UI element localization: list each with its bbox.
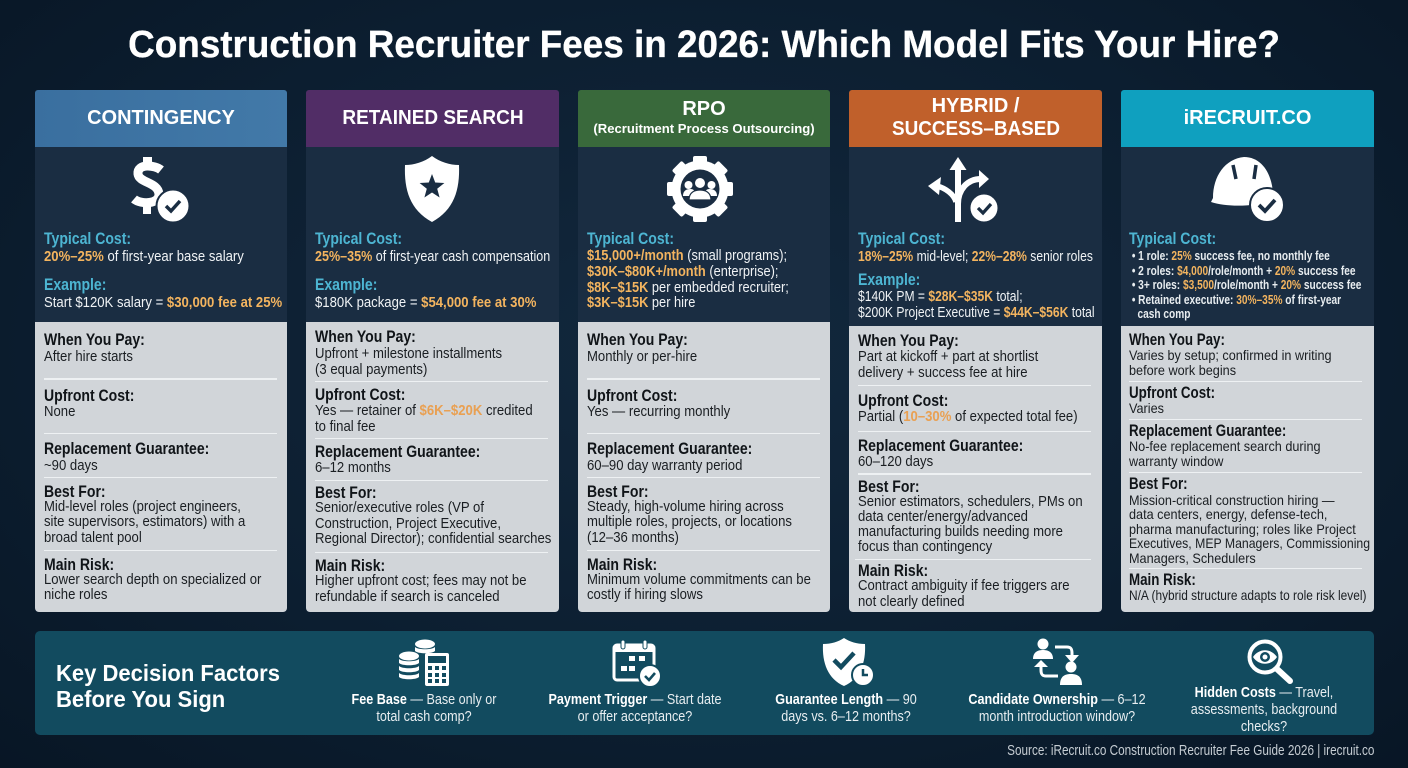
when you pay: When You Pay: <box>315 327 416 346</box>
text: fee base: Fee Base — Base only or <box>352 691 496 708</box>
icon: branching arrows <box>928 157 998 222</box>
main risk: refundable if search is canceled <box>315 588 500 604</box>
best for: site supervisors, estimators) with a <box>44 514 245 530</box>
main risk: niche roles <box>44 587 107 603</box>
main risk: Main Risk: <box>858 561 928 580</box>
best for <box>1128 474 1370 566</box>
upfront cost: Upfront Cost: <box>858 390 948 410</box>
main risk: Main Risk: <box>315 556 385 575</box>
heading: retained search <box>306 90 559 147</box>
heading: hybrid: HYBRID / <box>932 95 1019 117</box>
typical cost: 25%–35% of first-year cash compensation <box>315 249 550 265</box>
best for: Best For: <box>44 482 106 500</box>
panel: retained search <box>306 90 559 612</box>
typical cost <box>587 229 789 311</box>
main risk: costly if hiring slows <box>587 587 703 603</box>
best for: data center/energy/advanced <box>858 509 1028 525</box>
best for: manufacturing builds needing more <box>858 524 1063 540</box>
main risk <box>587 554 811 603</box>
main risk: Contract ambiguity if fee triggers are <box>858 578 1070 594</box>
when you pay <box>587 330 697 365</box>
text: fee base: total cash comp? <box>376 708 472 725</box>
example <box>858 270 1095 320</box>
panel: iRecruit.co <box>1121 90 1374 612</box>
example: $140K PM = $28K–$35K total; <box>858 288 1023 304</box>
main risk <box>858 561 1070 610</box>
example: Example: <box>858 270 920 288</box>
icon: magnifier with eye <box>1246 638 1296 686</box>
icon: calendar check <box>612 639 664 689</box>
panel: key decision factors <box>35 631 1374 735</box>
upfront cost <box>858 390 1078 424</box>
example: $200K Project Executive = $44K–$56K total <box>858 304 1095 320</box>
typical cost: Typical Cost: <box>587 229 674 248</box>
details panel <box>35 322 287 612</box>
replacement guarantee: Replacement Guarantee: <box>587 439 752 458</box>
heading: contingency: CONTINGENCY <box>87 107 235 129</box>
upfront cost: Upfront Cost: <box>587 386 677 404</box>
example: $180K package = $54,000 fee at 30% <box>315 294 536 310</box>
when you pay: Upfront + milestone installments <box>315 346 502 362</box>
best for: Best For: <box>858 476 920 496</box>
typical cost: • 1 role: 25% success fee, no monthly fee <box>1132 248 1330 263</box>
heading: contingency <box>35 90 287 147</box>
upfront cost: Yes — recurring monthly <box>587 404 730 420</box>
replacement guarantee: Replacement Guarantee: <box>1128 422 1286 440</box>
best for: multiple roles, projects, or locations <box>587 514 792 530</box>
example: Example: <box>315 274 377 294</box>
typical cost: $3K–$15K per hire <box>587 295 695 311</box>
when you pay <box>44 330 145 365</box>
best for: pharma manufacturing; roles like Project <box>1128 520 1355 536</box>
replacement guarantee: warranty window <box>1128 453 1223 469</box>
panel: contingency <box>35 90 287 612</box>
heading: key decision factors <box>56 660 280 712</box>
typical cost: Typical Cost: <box>858 229 945 248</box>
typical cost: • 2 roles: $4,000/role/month + 20% success fee <box>1132 262 1355 278</box>
heading: key decision factors: Before You Sign <box>56 686 225 712</box>
when you pay: (3 equal payments) <box>315 362 427 378</box>
text: candidate ownership: month introduction window? <box>979 708 1135 725</box>
text: guarantee length: Guarantee Length — 90 <box>775 691 917 708</box>
replacement guarantee <box>44 439 209 474</box>
text: payment trigger: or offer acceptance? <box>578 708 692 725</box>
when you pay: After hire starts <box>44 349 133 365</box>
best for <box>315 483 551 547</box>
text: fee base <box>352 691 496 725</box>
typical cost: $8K–$15K per embedded recruiter; <box>587 280 789 296</box>
typical cost: Typical Cost: <box>1129 229 1216 248</box>
replacement guarantee <box>315 442 480 476</box>
typical cost: cash comp <box>1137 306 1190 321</box>
icon: candidate swap <box>1032 638 1086 688</box>
typical cost: Typical Cost: <box>315 229 402 248</box>
upfront cost: Varies <box>1128 400 1163 416</box>
icon: hard hat check <box>1211 157 1283 221</box>
example <box>315 274 536 310</box>
details panel <box>1121 326 1374 612</box>
upfront cost <box>587 386 730 420</box>
typical cost <box>858 229 1093 265</box>
best for: Construction, Project Executive, <box>315 516 501 532</box>
heading: key decision factors: Key Decision Factors <box>56 660 280 686</box>
best for: Regional Director); confidential searches <box>315 531 551 547</box>
when you pay: Varies by setup; confirmed in writing <box>1128 346 1331 362</box>
upfront cost: Upfront Cost: <box>1128 384 1215 402</box>
when you pay: Monthly or per-hire <box>587 349 697 365</box>
typical cost: $30K–$80K+/month (enterprise); <box>587 264 779 280</box>
icon: dollar check <box>131 157 188 222</box>
when you pay <box>1128 330 1331 378</box>
when you pay: delivery + success fee at hire <box>858 365 1028 381</box>
best for <box>44 482 246 546</box>
when you pay <box>315 327 502 378</box>
text: hidden costs <box>1191 684 1337 735</box>
typical cost: 20%–25% of first-year base salary <box>44 249 244 265</box>
main risk <box>315 556 527 604</box>
typical cost: Typical Cost: <box>44 229 131 248</box>
best for: Managers, Schedulers <box>1128 550 1255 566</box>
upfront cost: Upfront Cost: <box>315 384 405 404</box>
heading: retained search: RETAINED SEARCH <box>342 107 523 129</box>
best for: Mission-critical construction hiring — <box>1128 492 1334 508</box>
heading: RPO: RPO <box>682 98 726 120</box>
icon: coins and calculator <box>399 640 449 686</box>
typical cost <box>1129 229 1361 321</box>
upfront cost: Upfront Cost: <box>44 386 134 404</box>
best for: Steady, high-volume hiring across <box>587 498 784 514</box>
typical cost: • Retained executive: 30%–35% of first-year <box>1132 292 1341 306</box>
best for: (12–36 months) <box>587 530 679 546</box>
upfront cost <box>44 386 134 420</box>
replacement guarantee: Replacement Guarantee: <box>44 439 209 458</box>
heading: iRecruit.co: iRECRUIT.CO <box>1184 107 1311 129</box>
typical cost: • 3+ roles: $3,500/role/month + 20% success fee <box>1132 277 1361 292</box>
main risk <box>44 554 262 603</box>
upfront cost: Partial (10–30% of expected total fee) <box>858 408 1078 424</box>
when you pay: When You Pay: <box>1128 330 1224 348</box>
text: candidate ownership: Candidate Ownership — 6–12 <box>968 691 1146 708</box>
icon: shield with clock <box>822 637 882 687</box>
example <box>44 274 282 310</box>
heading: hybrid <box>849 90 1102 147</box>
heading: iRecruit.co <box>1121 90 1374 147</box>
text: guarantee length: days vs. 6–12 months? <box>781 708 911 725</box>
heading: hybrid: SUCCESS–BASED <box>891 118 1060 140</box>
when you pay <box>858 331 1038 381</box>
when you pay: before work begins <box>1128 362 1236 378</box>
best for: Best For: <box>587 482 649 500</box>
replacement guarantee: 6–12 months <box>315 460 391 476</box>
best for: focus than contingency <box>858 539 992 555</box>
typical cost <box>315 229 550 265</box>
main risk: Higher upfront cost; fees may not be <box>315 573 527 589</box>
text: hidden costs: checks? <box>1241 718 1287 735</box>
main risk <box>1128 570 1366 603</box>
upfront cost: Yes — retainer of $6K–$20K credited <box>315 402 533 418</box>
when you pay: When You Pay: <box>587 330 688 349</box>
replacement guarantee <box>1128 422 1320 469</box>
replacement guarantee <box>587 439 752 474</box>
heading: RPO <box>578 90 830 147</box>
main risk: not clearly defined <box>858 594 965 610</box>
replacement guarantee: ~90 days <box>44 458 98 474</box>
replacement guarantee: 60–90 day warranty period <box>587 458 742 474</box>
upfront cost <box>1128 384 1215 416</box>
details panel <box>849 326 1102 612</box>
main risk: N/A (hybrid structure adapts to role risk level) <box>1128 586 1366 602</box>
typical cost: 18%–25% mid-level; 22%–28% senior roles <box>858 249 1093 265</box>
best for: broad talent pool <box>44 530 142 546</box>
when you pay: When You Pay: <box>44 330 145 349</box>
main risk: Main Risk: <box>44 554 114 574</box>
heading: RPO: (Recruitment Process Outsourcing) <box>593 121 815 136</box>
typical cost <box>44 229 244 265</box>
icon: shield star <box>404 156 460 222</box>
best for <box>858 476 1083 555</box>
panel: RPO <box>578 90 830 612</box>
replacement guarantee: Replacement Guarantee: <box>858 436 1023 454</box>
replacement guarantee: 60–120 days <box>858 454 933 470</box>
best for: Senior estimators, schedulers, PMs on <box>858 494 1083 510</box>
when you pay: When You Pay: <box>858 331 959 350</box>
best for: Executives, MEP Managers, Commissioning <box>1128 535 1370 551</box>
title: Construction Recruiter Fees in 2026: Which Model Fits Your Hire? <box>128 24 1280 66</box>
panel: hybrid <box>849 90 1102 612</box>
source line: Source: iRecruit.co Construction Recruiter Fee Guide 2026 | irecruit.co <box>1007 743 1374 759</box>
best for <box>587 482 792 546</box>
best for: Senior/executive roles (VP of <box>315 500 484 516</box>
text: hidden costs: Hidden Costs — Travel, <box>1195 684 1333 701</box>
typical cost: $15,000+/month (small programs); <box>587 248 787 264</box>
replacement guarantee: Replacement Guarantee: <box>315 442 480 461</box>
icon: gear with people <box>667 156 733 222</box>
main risk: Main Risk: <box>587 554 657 574</box>
when you pay: Part at kickoff + part at shortlist <box>858 349 1038 365</box>
main risk: Minimum volume commitments can be <box>587 572 811 588</box>
best for: Mid-level roles (project engineers, <box>44 498 241 514</box>
example: Example: <box>44 274 106 294</box>
upfront cost <box>315 384 533 434</box>
best for: data centers, energy, defense-tech, <box>1128 506 1327 522</box>
best for: Best For: <box>1128 474 1187 492</box>
upfront cost: None <box>44 404 75 420</box>
replacement guarantee <box>858 436 1023 470</box>
replacement guarantee: No-fee replacement search during <box>1128 438 1320 454</box>
text: candidate ownership <box>968 691 1146 725</box>
text: payment trigger <box>549 691 721 725</box>
best for: Best For: <box>315 483 377 502</box>
details panel <box>578 322 830 612</box>
main risk: Main Risk: <box>1128 570 1195 588</box>
text: hidden costs: assessments, background <box>1191 701 1337 718</box>
example: Start $120K salary = $30,000 fee at 25% <box>44 294 282 310</box>
details panel <box>306 322 559 612</box>
text: payment trigger: Payment Trigger — Start date <box>549 691 721 708</box>
main risk: Lower search depth on specialized or <box>44 572 261 588</box>
text: guarantee length <box>775 691 917 725</box>
upfront cost: to final fee <box>315 418 376 434</box>
